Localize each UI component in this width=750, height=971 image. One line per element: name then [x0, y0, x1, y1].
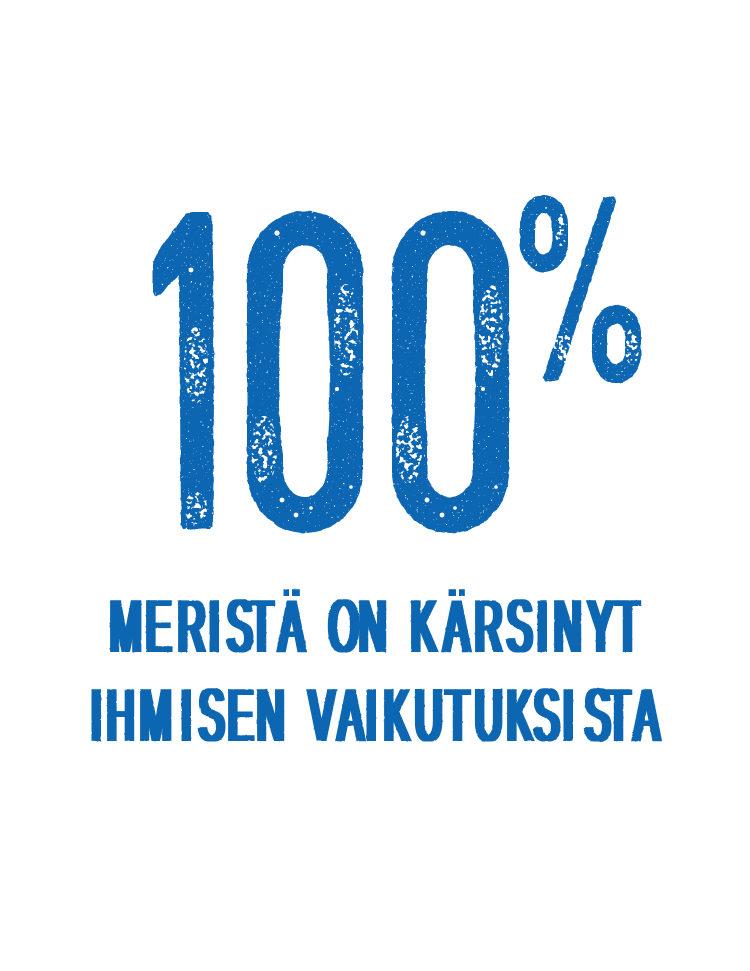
caption line 2: IHMISEN VAIKUTUKSISTA [91, 673, 659, 757]
caption line 1: MERISTÄ ON KÄRSINYT [110, 584, 639, 668]
second digit 0 [392, 211, 510, 534]
second digit 0: 0 [368, 99, 533, 648]
caption: two lines of tall condensed capitals [91, 582, 659, 757]
digit 1: 1 [117, 115, 260, 641]
percent sign: % [513, 144, 647, 445]
percent sign [520, 195, 642, 384]
first digit 0: 0 [223, 99, 387, 648]
headline figure: 100% [152, 195, 642, 534]
worn ink patches [184, 214, 639, 524]
first digit 0 [246, 210, 364, 534]
larger ink specks [189, 230, 498, 517]
